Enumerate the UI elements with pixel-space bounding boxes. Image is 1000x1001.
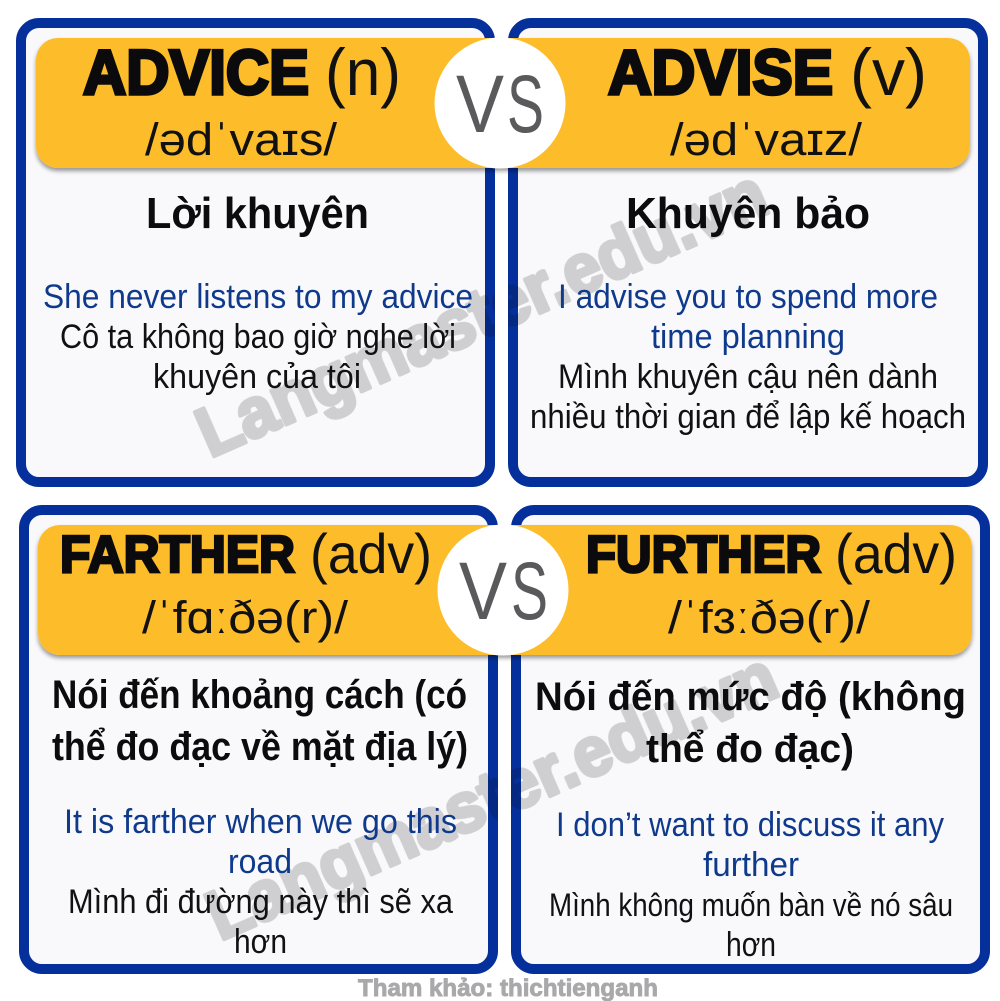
watermarks: Langmaster.edu.vn: [195, 637, 788, 955]
text block: further: Nói đến mức độ (không: [535, 675, 966, 719]
panel: farther: [24, 510, 493, 969]
text block: further: [535, 675, 966, 964]
text block: further: I don’t want to discuss it any: [556, 806, 944, 844]
heading: advise: (v): [850, 35, 927, 109]
text block: advice: Cô ta không bao giờ nghe lời: [60, 318, 456, 356]
VS badge: top: [434, 38, 566, 168]
header band: top: [36, 38, 970, 168]
VS badge: bottom: V: [459, 546, 507, 637]
heading: further: FURTHER: [586, 526, 821, 584]
text block: advice: khuyên của tôi: [153, 358, 361, 396]
header band: bottom: [38, 525, 972, 655]
text block: advise: Mình khuyên cậu nên dành: [558, 358, 938, 396]
panel: advise: [513, 23, 983, 482]
text block: farther: [52, 673, 468, 961]
VS badge: top: V: [456, 59, 504, 150]
text block: advice: [43, 189, 473, 396]
text block: farther: Nói đến khoảng cách (có: [52, 673, 467, 717]
phonetic: advice: /ədˈvaɪs/: [145, 114, 338, 165]
text block: advice: She never listens to my advice: [43, 278, 473, 316]
phonetic: farther: /ˈfɑːðə(r)/: [142, 592, 349, 643]
text block: farther: It is farther when we go this: [64, 803, 457, 841]
text block: farther: Mình đi đường này thì sẽ xa: [68, 883, 453, 921]
text block: advise: I advise you to spend more: [558, 278, 938, 316]
panel: further: [516, 510, 985, 969]
text block: further: thể đo đạc): [646, 727, 854, 771]
watermarks: [185, 154, 788, 955]
panel: advice: [21, 23, 490, 482]
text block: farther: thể đo đạc về mặt địa lý): [52, 725, 468, 769]
text block: advise: nhiều thời gian để lập kế hoạch: [530, 398, 966, 436]
VS badge: bottom: [438, 524, 568, 656]
text block: advice: Lời khuyên: [146, 189, 369, 238]
text block: advise: [530, 189, 966, 436]
heading: advice: (n): [325, 35, 401, 109]
text block: farther: road: [228, 843, 292, 881]
heading: advise: [608, 35, 927, 109]
heading: farther: FARTHER: [60, 526, 295, 584]
heading: further: (adv): [835, 522, 957, 585]
text block: advise: Khuyên bảo: [626, 189, 870, 238]
text block: further: further: [703, 846, 799, 884]
heading: farther: [60, 522, 432, 585]
text block: further: hơn: [726, 926, 776, 964]
heading: farther: (adv): [310, 522, 432, 585]
heading: advice: ADVICE: [83, 38, 309, 108]
heading: advise: ADVISE: [608, 38, 833, 108]
heading: further: [586, 522, 957, 585]
text block: advise: time planning: [651, 318, 845, 356]
VS badge: bottom: S: [511, 546, 548, 637]
phonetic: further: /ˈfɜːðə(r)/: [668, 592, 871, 643]
watermarks: Langmaster.edu.vn: [185, 154, 778, 472]
phonetic: advise: /ədˈvaɪz/: [670, 114, 863, 165]
text block: farther: hơn: [234, 923, 287, 961]
VS badge: top: S: [507, 59, 544, 150]
